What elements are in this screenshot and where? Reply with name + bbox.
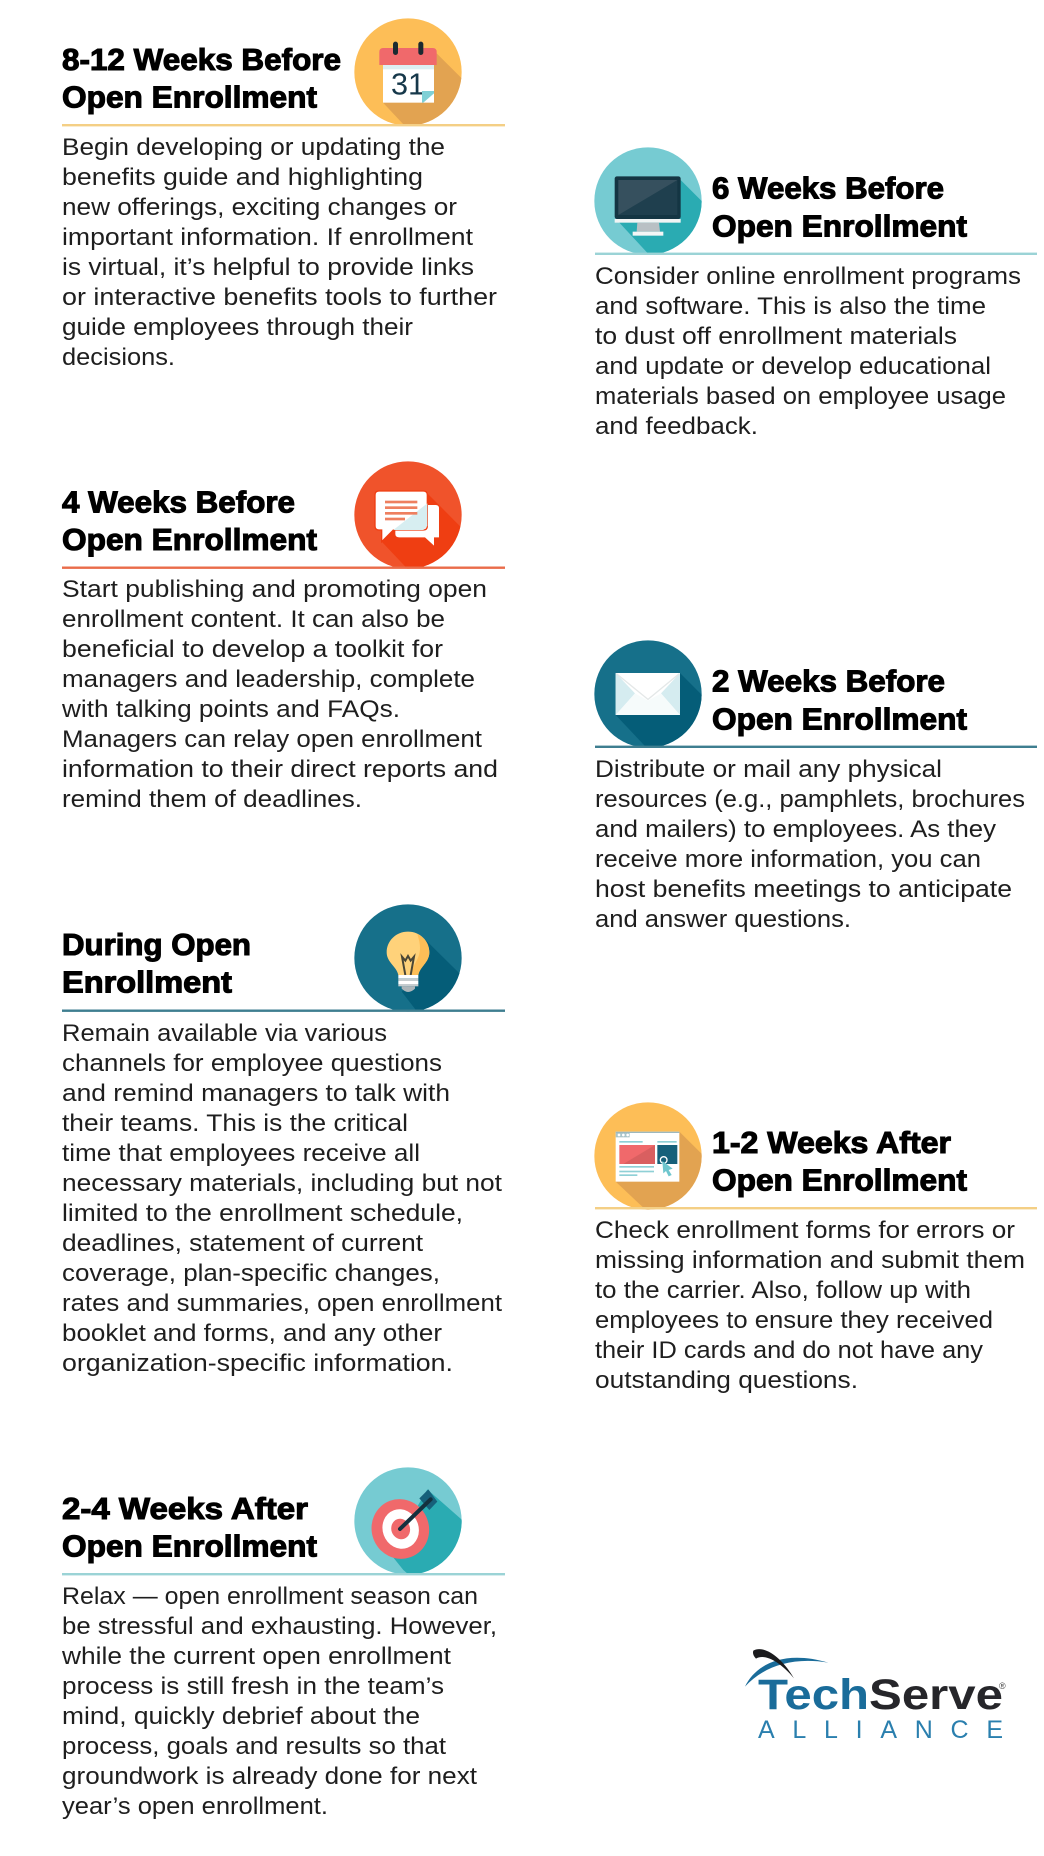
text: 8-12 weeks body: benefits guide and highlighting [62, 164, 423, 191]
heading: during open enrollment: Enrollment [62, 964, 232, 1000]
text: during enrollment body: coverage, plan-specific changes, [62, 1260, 440, 1287]
text: 6 weeks body: to dust off enrollment materials [595, 323, 957, 350]
text: 2-4 weeks body [61, 1583, 497, 1820]
heading: 1-2 weeks after: 1-2 Weeks After [712, 1125, 951, 1160]
icon: browser window [594, 1102, 702, 1210]
heading: 6 weeks before: 6 Weeks Before [712, 170, 944, 206]
heading: 6 weeks before: Open Enrollment [712, 208, 967, 244]
text: during enrollment body [62, 1020, 502, 1377]
text: 4 weeks body: beneficial to develop a toolkit for [62, 636, 443, 663]
text: 2-4 weeks body: mind, quickly debrief about the [62, 1703, 420, 1730]
heading: 6 weeks before [712, 170, 967, 244]
text: during enrollment body: channels for employee questions [62, 1050, 442, 1077]
heading: 1-2 weeks after: Open Enrollment [712, 1162, 967, 1198]
text: 1-2 weeks body: employees to ensure they received [595, 1307, 993, 1334]
heading: 4 weeks before [62, 484, 317, 557]
heading: 2 weeks before: Open Enrollment [712, 702, 967, 736]
text: 1-2 weeks body: outstanding questions. [595, 1367, 858, 1394]
heading: 2 weeks before [712, 664, 967, 736]
panel: 1-2 weeks after [594, 1102, 1037, 1394]
panel: 2-4 weeks after [61, 1467, 505, 1820]
heading: 8-12 weeks before [62, 42, 341, 114]
heading: 8-12 weeks before: Open Enrollment [62, 80, 317, 114]
text: 6 weeks body [595, 263, 1021, 440]
panel: 2 weeks before [594, 640, 1037, 933]
logo: TechServe Alliance [745, 1649, 1006, 1744]
text: 4 weeks body [61, 576, 498, 813]
text: 2 weeks body: host benefits meetings to anticipate [595, 876, 1012, 903]
text: 6 weeks body: and software. This is also the time [595, 293, 986, 320]
text: 6 weeks body: and update or develop educational [595, 353, 991, 380]
text: 4 weeks body: managers and leadership, complete [62, 666, 475, 693]
icon: target with dart [354, 1467, 462, 1573]
text: 4 weeks body: Managers can relay open enrollment [62, 726, 482, 753]
icon: envelope [594, 640, 702, 746]
heading: 4 weeks before: 4 Weeks Before [62, 484, 295, 520]
text: 4 weeks body: enrollment content. It can also be [62, 606, 445, 633]
text: 4 weeks body: with talking points and FAQs. [61, 696, 400, 723]
text: during enrollment body: time that employees receive all [62, 1140, 420, 1167]
wordmark: Tech Serve [758, 1671, 1003, 1719]
heading: 4 weeks before: Open Enrollment [62, 522, 317, 557]
panel: during open enrollment [62, 904, 505, 1377]
text: 4 weeks body: information to their direct reports and [62, 756, 498, 783]
text: 2-4 weeks body: process is still fresh in the team’s [62, 1673, 444, 1700]
panel: 4 weeks before [61, 461, 505, 813]
text: 8-12 weeks body: Begin developing or updating the [62, 134, 445, 161]
text: 1-2 weeks body: their ID cards and do not have any [595, 1337, 984, 1364]
text: 2 weeks body: and answer questions. [595, 906, 851, 933]
text: 1-2 weeks body: to the carrier. Also, follow up with [595, 1277, 971, 1304]
text: 2 weeks body: receive more information, you can [595, 846, 981, 873]
icon: light bulb [354, 904, 462, 1012]
text: 2 weeks body: Distribute or mail any physical [595, 756, 942, 783]
heading: during open enrollment [62, 927, 251, 1000]
text: 8-12 weeks body: is virtual, it’s helpful to provide links [62, 254, 474, 281]
text: 6 weeks body: materials based on employee usage [595, 383, 1006, 410]
icon: chat bubbles [354, 461, 462, 569]
text: 6 weeks body: and feedback. [595, 413, 758, 440]
text: 2-4 weeks body: be stressful and exhausting. However, [62, 1613, 497, 1640]
icon: calendar [354, 18, 462, 124]
text: 8-12 weeks body: decisions. [62, 344, 175, 371]
text: 2-4 weeks body: year’s open enrollment. [62, 1793, 328, 1820]
text: during enrollment body: deadlines, statement of current [62, 1230, 423, 1257]
text: 2-4 weeks body: while the current open enrollment [61, 1643, 451, 1670]
text: 8-12 weeks body: new offerings, exciting changes or [62, 194, 457, 221]
panel: 8-12 weeks before [62, 18, 505, 371]
text: 6 weeks body: Consider online enrollment programs [595, 263, 1021, 290]
registered mark: ® [999, 1681, 1006, 1691]
text: 2 weeks body: and mailers) to employees. As they [595, 816, 997, 843]
text: during enrollment body: limited to the enrollment schedule, [62, 1200, 463, 1227]
heading: 8-12 weeks before: 8-12 Weeks Before [62, 42, 341, 77]
text: during enrollment body: rates and summaries, open enrollment [62, 1290, 502, 1317]
icon: logo swoosh [745, 1649, 828, 1687]
text: 2 weeks body: resources (e.g., pamphlets, brochures [595, 786, 1025, 813]
text: during enrollment body: necessary materials, including but not [62, 1170, 502, 1197]
text: 8-12 weeks body [62, 134, 497, 371]
text: 2-4 weeks body: groundwork is already done for next [62, 1763, 477, 1790]
heading: 2 weeks before: 2 Weeks Before [712, 664, 945, 698]
text: during enrollment body: organization-specific information. [62, 1350, 453, 1377]
text: 8-12 weeks body: guide employees through their [62, 314, 413, 341]
text: 2-4 weeks body: Relax — open enrollment season can [62, 1583, 478, 1610]
text: 1-2 weeks body [595, 1217, 1025, 1394]
heading: 2-4 weeks after: Open Enrollment [62, 1528, 317, 1564]
text: during enrollment body: their teams. This is the critical [62, 1110, 408, 1137]
text: during enrollment body: Remain available via various [62, 1020, 387, 1047]
icon: monitor [594, 147, 702, 253]
text: 4 weeks body: Start publishing and promoting open [62, 576, 487, 603]
text: 2 weeks body [595, 756, 1025, 933]
heading: 2-4 weeks after [62, 1491, 317, 1564]
text: 8-12 weeks body: important information. If enrollment [62, 224, 473, 251]
icon: calendar: 31 [391, 68, 425, 102]
heading: 1-2 weeks after [712, 1125, 967, 1198]
text: 1-2 weeks body: Check enrollment forms for errors or [595, 1217, 1015, 1244]
heading: 2-4 weeks after: 2-4 Weeks After [62, 1491, 308, 1526]
text: 8-12 weeks body: or interactive benefits tools to further [62, 284, 497, 311]
panel: 6 weeks before [594, 147, 1037, 440]
text: during enrollment body: and remind managers to talk with [62, 1080, 450, 1107]
heading: during open enrollment: During Open [62, 927, 251, 962]
text: during enrollment body: booklet and forms, and any other [62, 1320, 442, 1347]
text: 4 weeks body: remind them of deadlines. [62, 786, 362, 813]
tagline: ALLIANCE [758, 1716, 1003, 1744]
text: 1-2 weeks body: missing information and submit them [595, 1247, 1025, 1274]
text: 2-4 weeks body: process, goals and results so that [62, 1733, 446, 1760]
